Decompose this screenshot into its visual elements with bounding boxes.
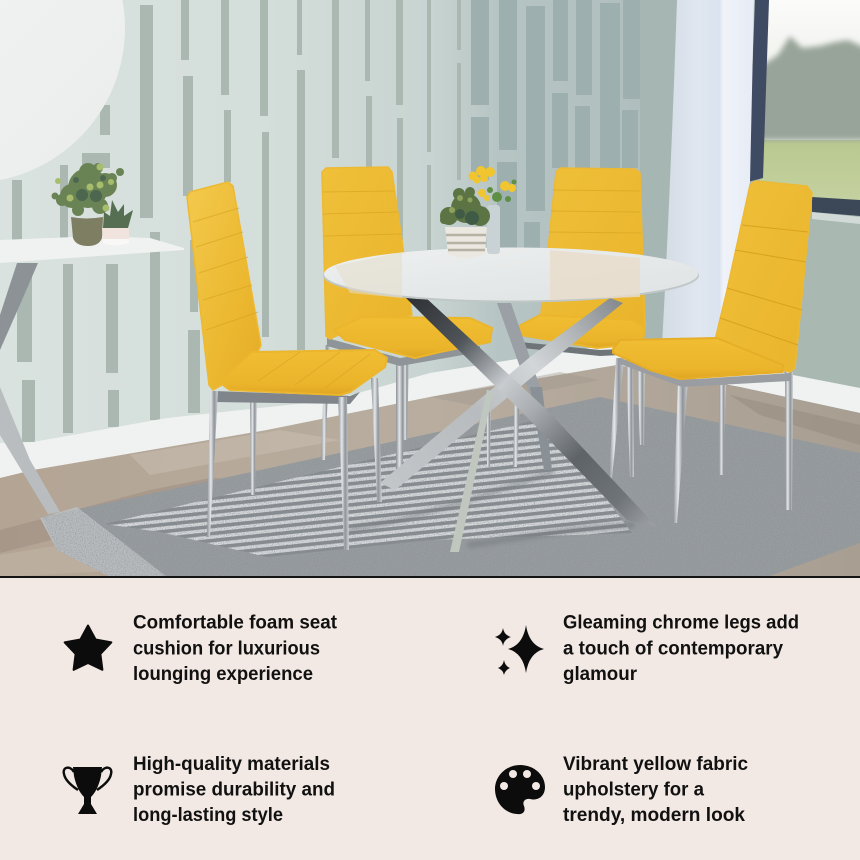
- main cross bar: [405, 297, 657, 527]
- text: foam seat: cushion for luxurious: [133, 638, 320, 660]
- divider line: [0, 576, 860, 578]
- panel background: [0, 578, 860, 860]
- text: yellow fabric: trendy, modern look: [563, 805, 745, 826]
- wall panels: right darker recesses: [471, 0, 640, 248]
- table legs: [380, 297, 657, 552]
- window frame: [748, 0, 769, 182]
- cross bar right to left: [380, 298, 623, 490]
- seams: [323, 191, 402, 236]
- backrest: [322, 167, 412, 339]
- backrest: [540, 168, 645, 328]
- icon: star: [65, 626, 111, 670]
- yellow flowers: [468, 166, 516, 201]
- chair right foreground: [609, 181, 812, 523]
- seams: [193, 208, 258, 330]
- glass vase: [487, 205, 500, 254]
- frame: [520, 342, 640, 356]
- rug speckle: [42, 397, 860, 577]
- flower leaves: [487, 180, 516, 202]
- striped pot: [445, 227, 487, 258]
- text: chrome legs: a touch of contemporary: [563, 638, 783, 660]
- wall plain right section: [640, 0, 680, 350]
- rug: [40, 397, 860, 577]
- seat: [517, 315, 645, 348]
- back chair reflection: [335, 252, 402, 298]
- back legs: [250, 400, 257, 495]
- rug base: [42, 397, 860, 577]
- legs: [609, 358, 624, 478]
- seat: [223, 350, 387, 395]
- console lower leg: [0, 387, 60, 514]
- front leg: [450, 390, 493, 552]
- rug fringe: [40, 507, 167, 577]
- feature: chrome legs: [495, 612, 799, 685]
- text: materials: promise durability and: [133, 780, 335, 800]
- backrest: [715, 181, 812, 372]
- feature panel: [0, 578, 860, 860]
- chair left foreground: [187, 182, 387, 550]
- text: chrome legs: glamour: [563, 664, 638, 685]
- small pink pot: [102, 228, 129, 246]
- frame: [327, 338, 480, 366]
- rim: [323, 248, 699, 302]
- text: materials: long-lasting style: [133, 805, 283, 826]
- text: yellow fabric: upholstery for a: [563, 780, 704, 800]
- round mirror: [0, 0, 125, 183]
- backrest: [187, 182, 261, 390]
- text: yellow fabric: Vibrant yellow fabric: [563, 754, 748, 775]
- window view: [755, 0, 860, 200]
- foliage highlights: [55, 164, 114, 212]
- front legs: [207, 391, 218, 537]
- rear leg lower: [530, 387, 552, 470]
- pot stripes: [446, 235, 486, 250]
- text: foam seat: lounging experience: [133, 664, 313, 685]
- icon: trophy: [64, 767, 111, 814]
- foliage: [52, 163, 124, 216]
- baseboard: [0, 340, 860, 478]
- console upper leg: [0, 263, 38, 350]
- icon: palette: [495, 765, 545, 814]
- text: chrome legs: Gleaming chrome legs add: [563, 612, 799, 634]
- seams: [720, 225, 808, 345]
- text: materials: High-quality materials: [133, 754, 330, 775]
- frame: [214, 391, 360, 404]
- legs: [321, 345, 330, 460]
- frame: [620, 358, 790, 387]
- console table: [0, 236, 184, 514]
- marble vein reflection: [550, 250, 640, 300]
- seams: [549, 190, 641, 233]
- text: chrome legs: [563, 612, 799, 685]
- wall background: [0, 0, 860, 577]
- stone pot: [71, 217, 103, 246]
- seat: [613, 338, 783, 379]
- rear leg upper: [497, 303, 540, 395]
- pot white base: [103, 239, 129, 246]
- wooden floor: [0, 365, 860, 577]
- console top: [0, 236, 184, 263]
- chair back-left: [321, 167, 492, 486]
- text: foam seat: Comfortable foam seat: [133, 612, 338, 634]
- window sill: [812, 212, 860, 224]
- lower wall under window: [750, 215, 860, 390]
- wall panel slots: left: [12, 0, 461, 442]
- text: materials: [133, 754, 335, 826]
- legs: [513, 375, 521, 467]
- room photograph: [0, 0, 860, 577]
- small plant: [103, 200, 133, 228]
- feature: yellow fabric: [495, 754, 748, 826]
- rug stripes: [105, 418, 632, 557]
- glass table top: [323, 248, 699, 302]
- trees: [755, 36, 860, 140]
- sheer curtain: [662, 0, 754, 345]
- centerpiece: [440, 166, 516, 258]
- plant highlights: [449, 195, 472, 213]
- floor planks: [0, 372, 860, 577]
- dark leaves: [73, 175, 106, 202]
- seat seams: [258, 352, 370, 388]
- icon: sparkles: [495, 625, 544, 675]
- window bottom frame: [812, 197, 860, 216]
- seat: [334, 317, 492, 358]
- leg shadows on rug: [350, 472, 632, 545]
- plant on console: [52, 163, 133, 246]
- feature: foam seat: [65, 612, 338, 685]
- chair back-right: [486, 168, 645, 477]
- green plant: [440, 187, 490, 226]
- text: foam seat: [133, 612, 338, 685]
- plant dark centre: [455, 209, 479, 225]
- surface: [324, 248, 698, 300]
- feature: materials: [64, 754, 335, 826]
- text: yellow fabric: [563, 754, 748, 826]
